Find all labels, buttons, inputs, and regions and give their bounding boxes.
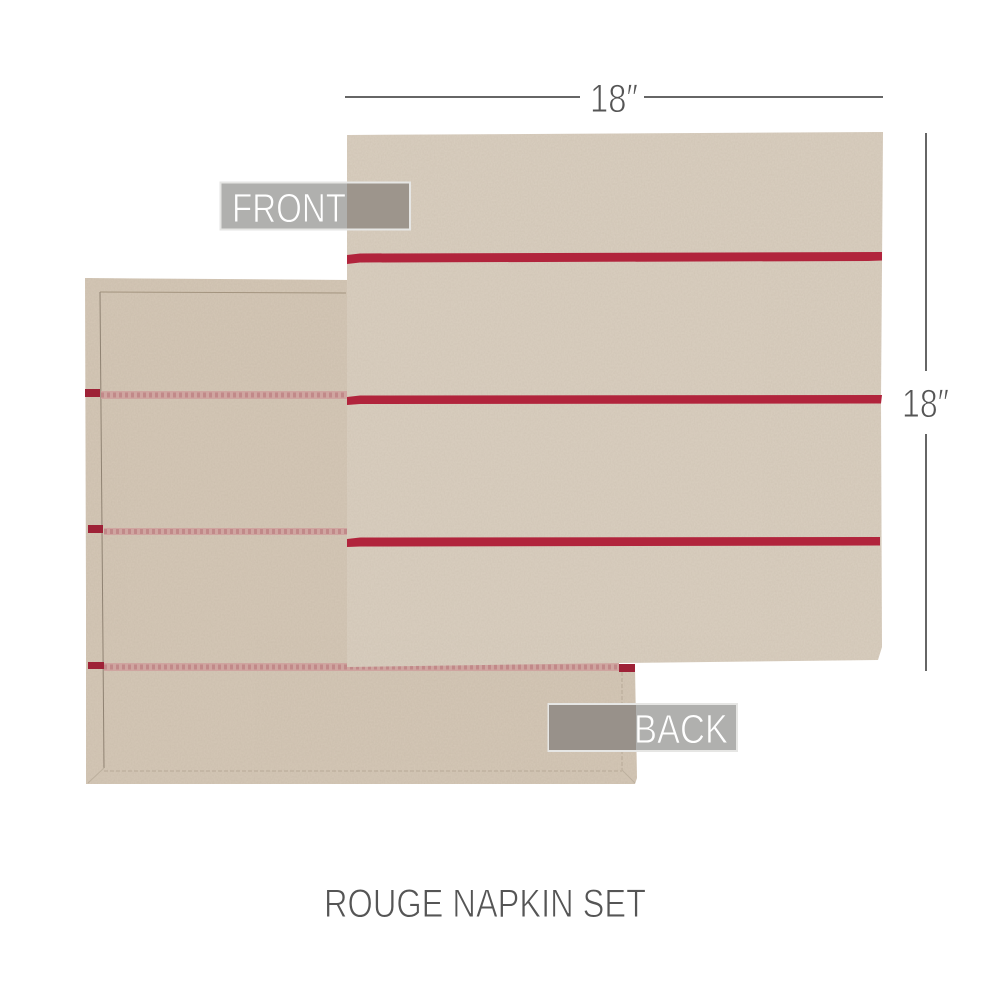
front stripe 2 — [347, 395, 882, 405]
title: ROUGE NAPKIN SET — [324, 882, 646, 926]
front stripe 1 — [347, 252, 882, 264]
label: back — [548, 704, 737, 752]
napkin: front side — [347, 132, 883, 667]
label: front: FRONT — [232, 185, 346, 231]
back stripe 2 — [88, 525, 347, 535]
napkin: back side — [85, 278, 637, 784]
front stripe 3 — [347, 537, 880, 547]
back stripe 1 — [85, 389, 347, 399]
dimension: height 18 inches: 18″ — [902, 382, 949, 426]
dimension: width 18 inches: 18″ — [590, 77, 638, 121]
label: back: BACK — [634, 706, 728, 752]
back stripe 3 — [88, 662, 635, 672]
